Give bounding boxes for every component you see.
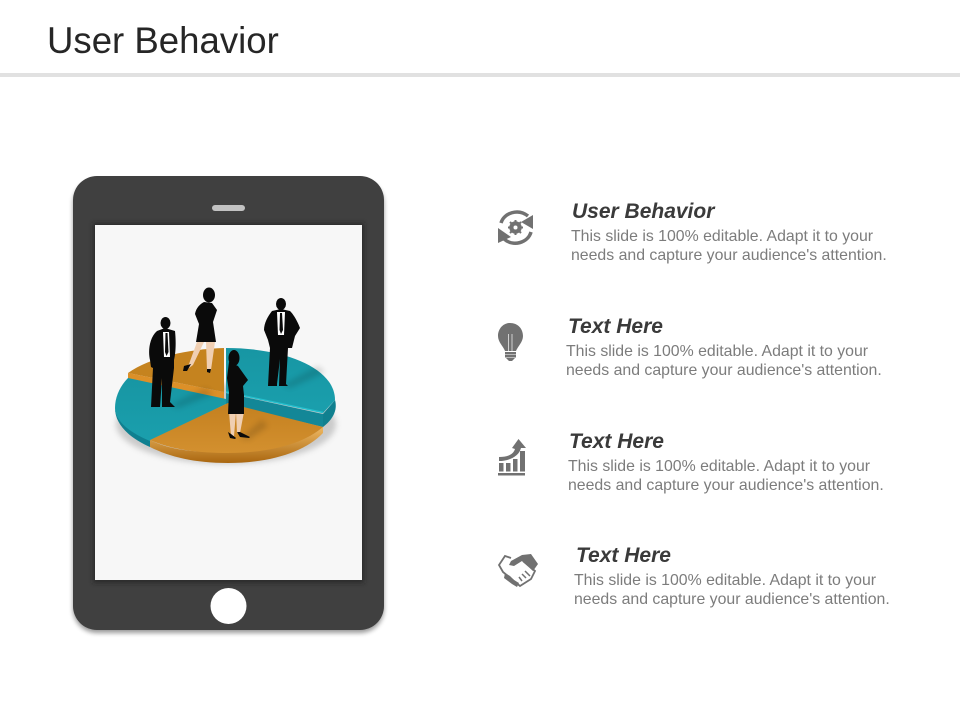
person: man right [264, 298, 300, 386]
home button [210, 588, 246, 624]
text block: item two: Text Here [568, 315, 663, 338]
person: woman front [227, 350, 250, 439]
title: User Behavior [47, 20, 279, 61]
pie chart [115, 348, 336, 464]
figure shadows [170, 366, 325, 440]
text block: item four [574, 544, 890, 608]
text block: item two: This slide is 100% editable. Adapt it to your [566, 343, 868, 360]
text block: item three: needs and capture your audience's attention. [568, 477, 884, 494]
text block: item three: This slide is 100% editable. Adapt it to your [568, 458, 870, 475]
pie slice: bottom orange [150, 403, 323, 463]
text block: item four: needs and capture your audience's attention. [574, 591, 890, 608]
person: man left [149, 317, 176, 407]
text block: item three: Text Here [569, 430, 664, 453]
text block: item two [566, 315, 882, 379]
speaker slot [212, 205, 245, 211]
text block: user behavior [571, 200, 887, 264]
tablet screen [93, 223, 364, 583]
tablet body [73, 176, 384, 633]
text block: item four: Text Here [576, 544, 671, 567]
pie slice: top left orange [128, 348, 224, 402]
text block: item three [568, 430, 884, 494]
text block: user behavior: User Behavior [572, 200, 714, 223]
text block: user behavior: needs and capture your audience's attention. [571, 247, 887, 264]
header rule [0, 73, 960, 77]
text block: user behavior: This slide is 100% editable. Adapt it to your [571, 228, 873, 245]
pie slice: right teal [226, 348, 336, 427]
pie slice: left teal [115, 378, 228, 447]
text block: item two: needs and capture your audience's attention. [566, 362, 882, 379]
person: woman back [183, 288, 217, 373]
text block: item four: This slide is 100% editable. Adapt it to your [574, 572, 876, 589]
